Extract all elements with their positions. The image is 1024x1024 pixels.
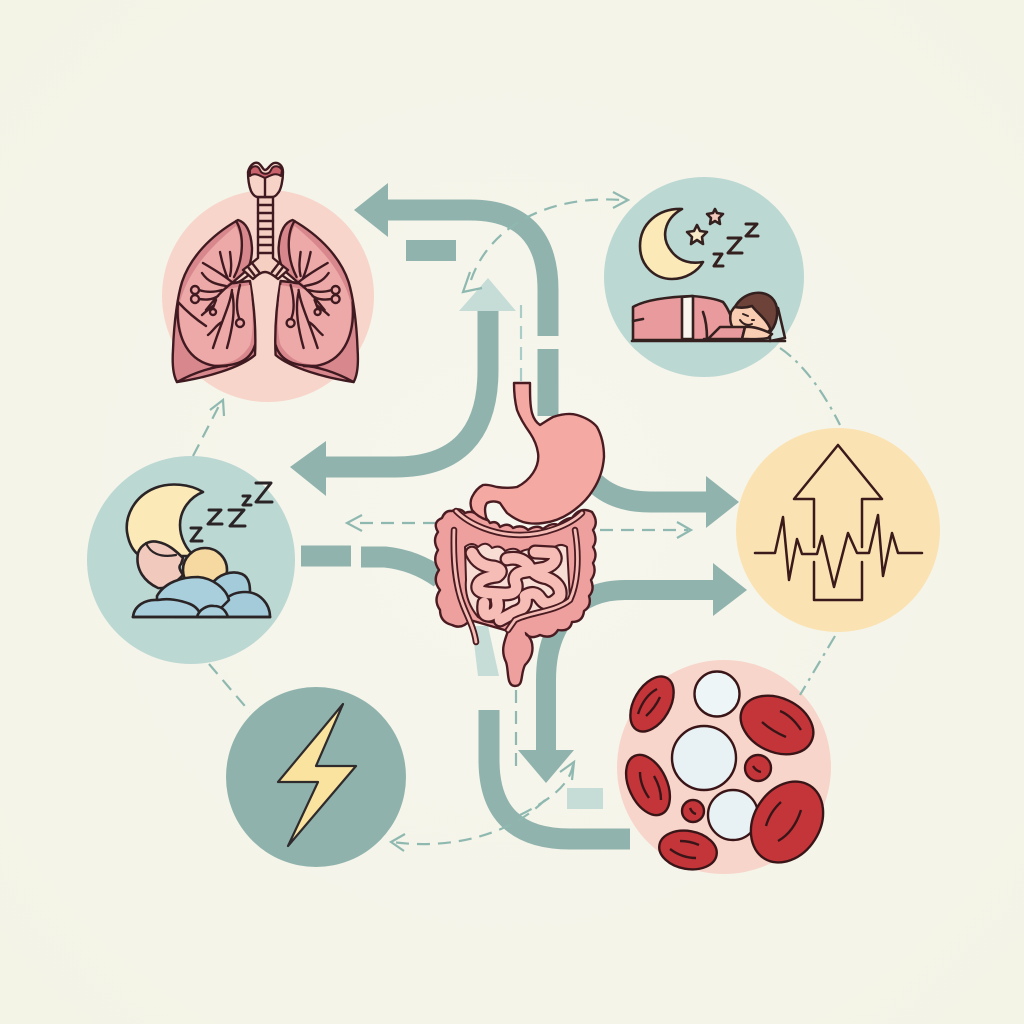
pale connector below gut: [472, 626, 499, 676]
arrow: curve to heartbeat lower and down: [518, 563, 747, 783]
small red cells: [745, 755, 771, 781]
arrow: left connector to gut: [301, 556, 440, 578]
dashed connector arrows: [193, 192, 840, 851]
panel: energy circle: [226, 687, 406, 867]
icon: crescent moon with stars and z: [632, 209, 785, 341]
icon: moon, face and clouds: [127, 483, 272, 617]
panel: heartbeat circle: [736, 428, 940, 632]
larynx: [248, 163, 283, 197]
arrow: pale up arrowhead: [459, 278, 516, 311]
white cell 2: [672, 726, 736, 790]
panel: lungs circle: [162, 190, 374, 402]
label placeholder: pale lower block: [567, 788, 603, 809]
icon: stomach and intestines: [435, 383, 604, 686]
right lung: [275, 220, 358, 382]
left lung: [173, 220, 255, 382]
icon: lungs: [173, 163, 358, 382]
red cell 4: [736, 768, 838, 876]
icon: lightning bolt: [278, 704, 356, 846]
arrow: top curve to lungs: [354, 183, 548, 416]
panel: moon and clouds circle: [87, 456, 295, 664]
red cell 1: [621, 669, 683, 739]
white cell 3: [708, 790, 758, 840]
sleeper body: [633, 296, 735, 340]
arrow: lower left curve to blood: [489, 710, 630, 839]
icon: blood cells: [617, 669, 838, 876]
small intestine cavity: [465, 544, 570, 622]
rectum fill patch: [508, 628, 526, 640]
pillow: [770, 305, 785, 341]
trachea rings: [248, 205, 283, 276]
small intestine coils fill: [472, 552, 560, 620]
trachea: [243, 197, 288, 279]
red cell 5: [656, 826, 720, 874]
stomach: [470, 383, 604, 524]
panel: sleep circle: [604, 177, 804, 377]
larynx top band and midline: [250, 166, 282, 178]
sleeper arm: [708, 327, 745, 339]
white cell 1: [694, 672, 740, 716]
arrow: curve from centre to left: [290, 310, 488, 496]
panel: blood cells circle: [617, 660, 831, 874]
large intestine: [435, 509, 596, 686]
red cell 2: [731, 684, 823, 766]
icon: up arrow with ECG: [755, 445, 922, 600]
arrow: stomach to heartbeat upper: [595, 476, 739, 528]
red cell 3: [617, 748, 679, 822]
clouds: [211, 572, 250, 600]
label placeholder: upper block: [406, 240, 456, 261]
small intestine coils outline: [472, 552, 560, 620]
colon bands fill: [454, 511, 582, 642]
sleeper head: [730, 298, 774, 336]
colon bands outline: [454, 511, 582, 642]
